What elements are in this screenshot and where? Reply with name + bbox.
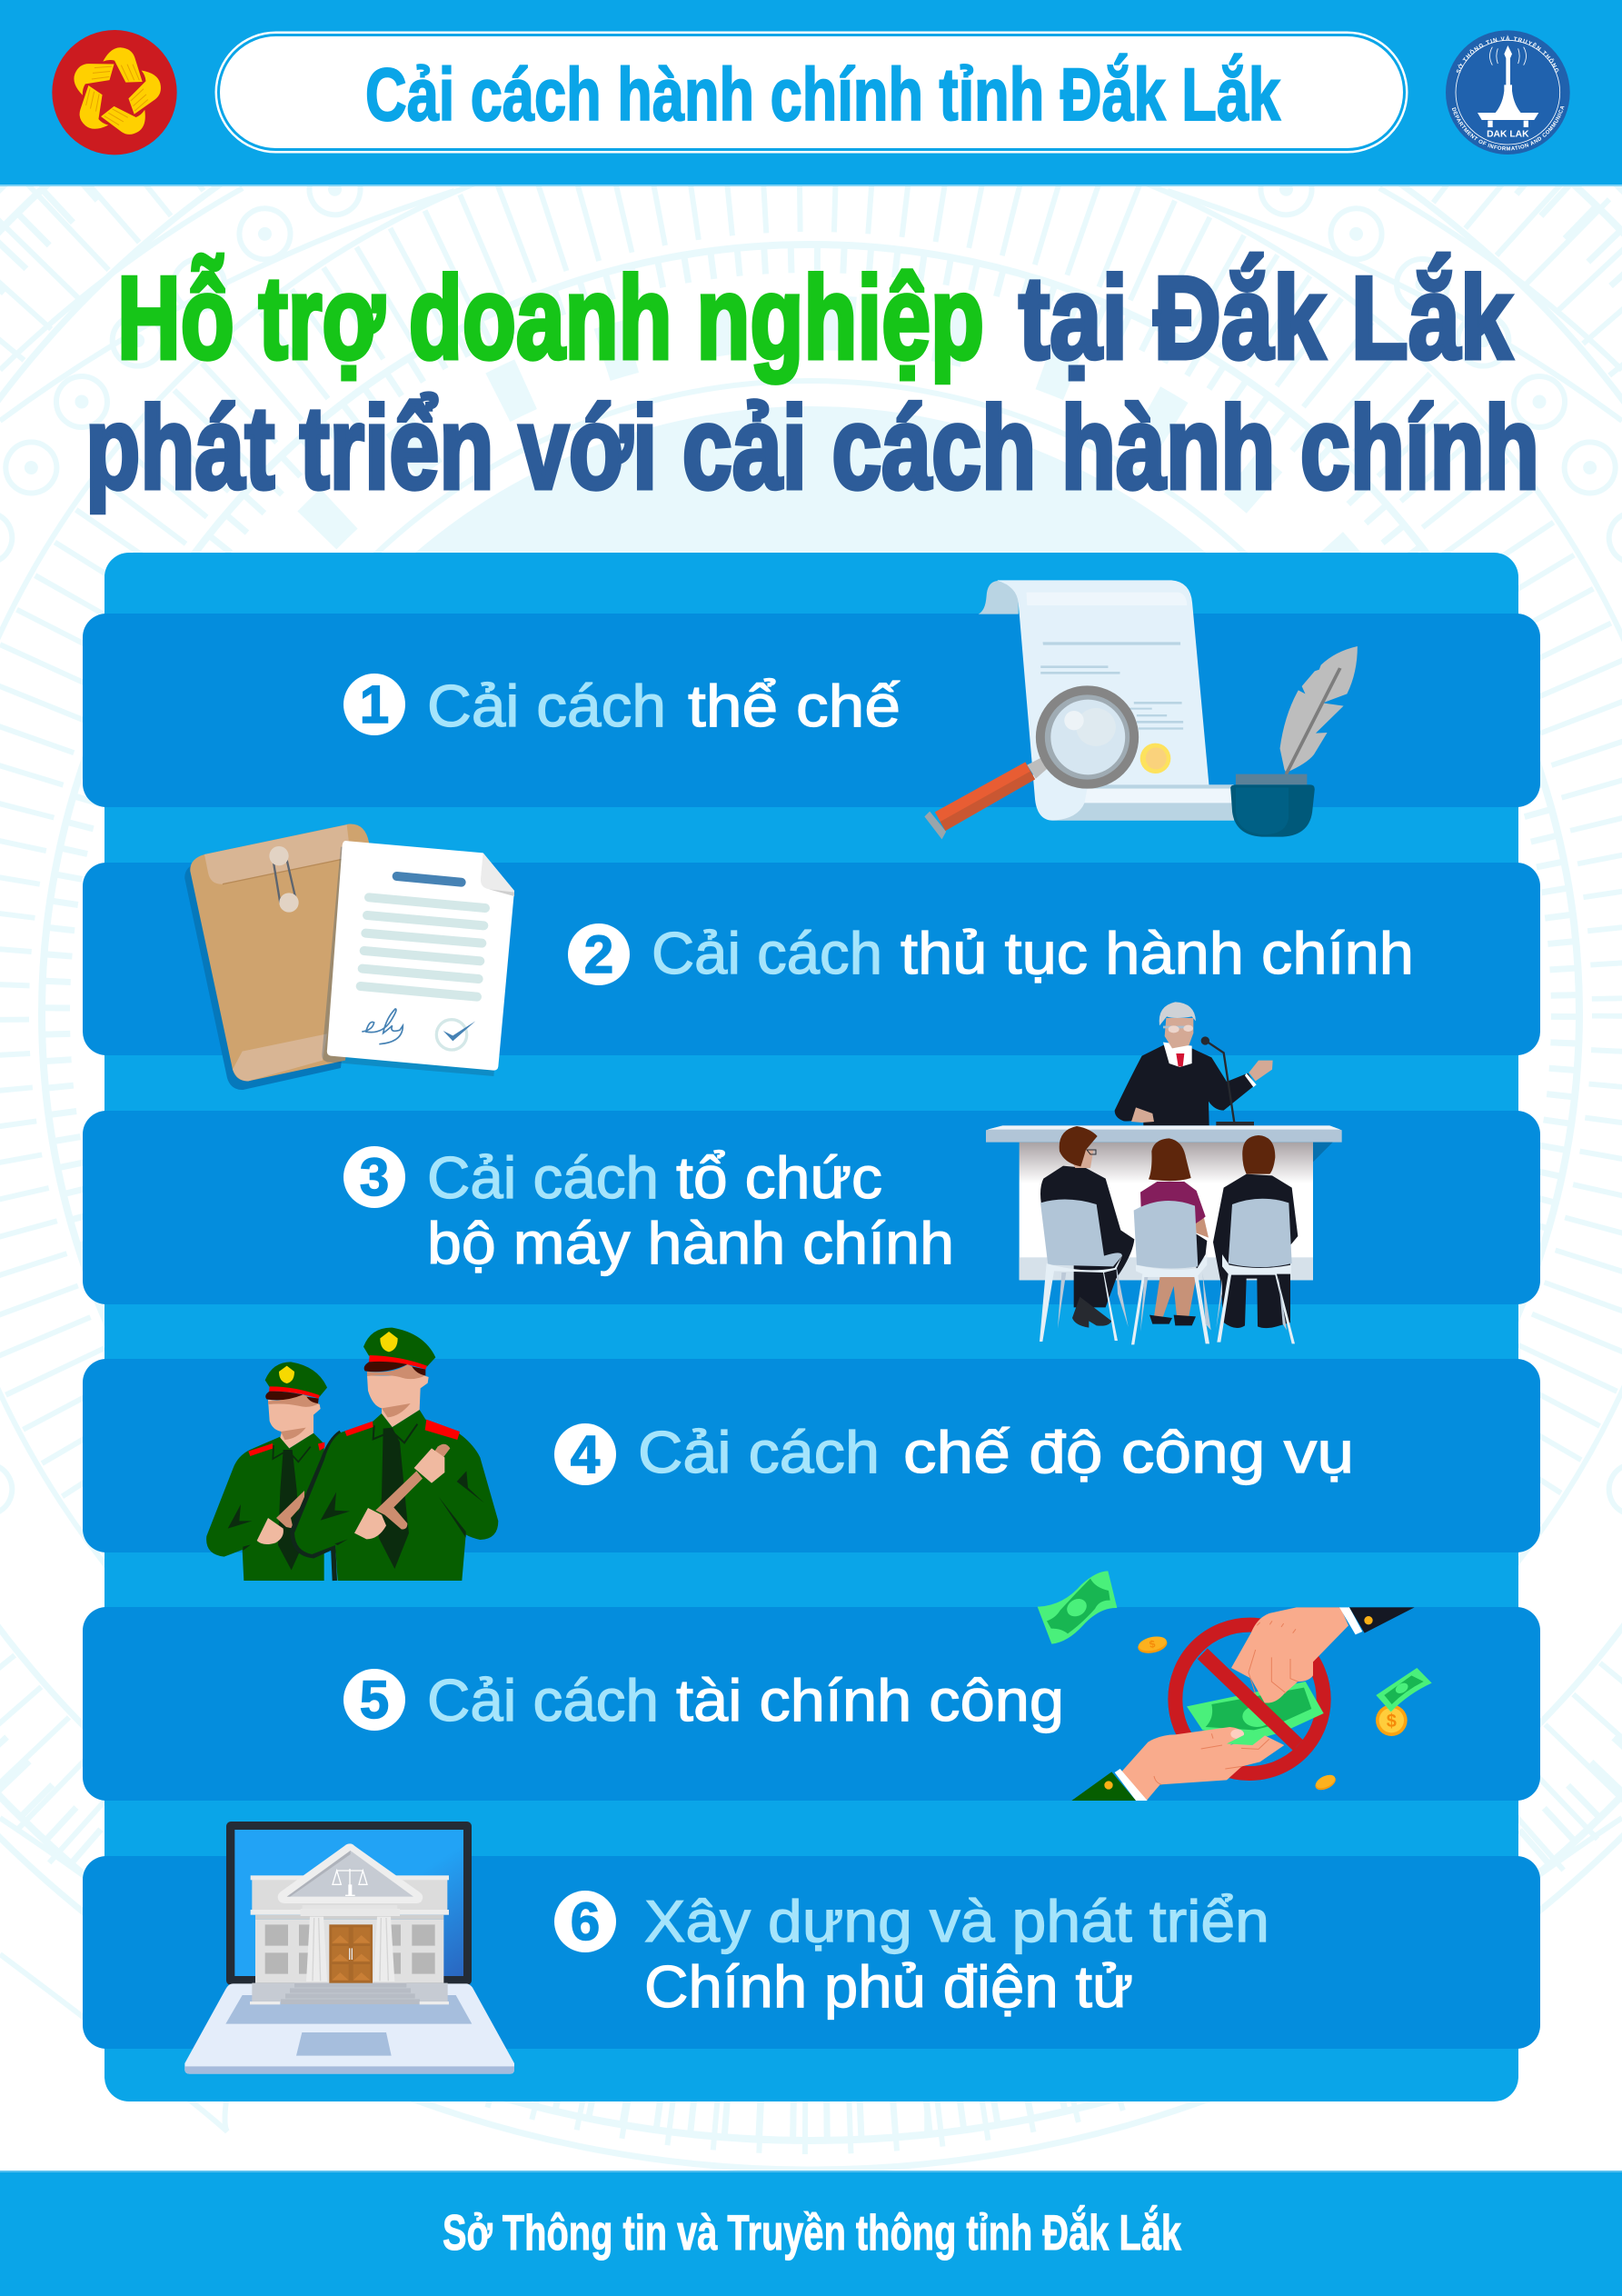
icon: envelope and signed document [184,824,514,1090]
row 6 band: 6 [571,1892,600,1952]
person 2 [1131,1138,1211,1344]
row 5 band: 5 [360,1671,389,1730]
logo: Department of Information and Communications: DEPARTMENT OF INFORMATION AND COMMUNICATIONS [1452,106,1565,151]
front officer [293,1328,498,1581]
row 1 band: Cải cách [427,673,666,739]
back officer [206,1362,327,1581]
footer bar [0,2171,1622,2296]
panel: list background [104,553,1518,2101]
row 1 band: thể chế [688,673,901,739]
row 3 band: bộ máy hành chính [427,1210,954,1276]
logo: Department of Information and Communications: DAK LAK [1487,130,1529,140]
row 4 band [83,1359,1540,1552]
logo: Department of Information and Communications [1446,30,1570,155]
row 4 band: chế độ công vụ [903,1419,1354,1485]
row 3 band [83,1111,1540,1304]
icon: scroll, magnifier and quill [924,580,1358,839]
row 4 band: 4 [571,1425,600,1484]
person 3 [1213,1135,1298,1343]
icon: speaker at a desk with three seated people [986,1002,1342,1344]
row 1 band: 1 [360,675,389,734]
row 3 band: Cải cách [427,1144,659,1211]
main title [85,253,1539,514]
row 2 band: 2 [584,925,613,984]
row 5 band: tài chính công [676,1667,1064,1733]
row 3 band: tổ chức [676,1144,882,1211]
row 4 band: Cải cách [638,1419,880,1485]
row 5 band [83,1607,1540,1801]
main title: tại Đắk Lắk [1019,253,1512,384]
row 6 band: Chính phủ điện tử [644,1953,1133,2020]
row 2 band: Cải cách [652,920,882,986]
row 6 band: Xây dựng và phát triển [644,1888,1269,1954]
main title: Hỗ trợ doanh nghiệp [117,253,984,384]
icon: banned cash exchange between hands: $ [1387,1712,1397,1732]
icon: two uniformed officers [206,1328,498,1581]
logo: Department of Information and Communications: SỞ THÔNG TIN VÀ TRUYỀN THÔNG [1456,35,1559,74]
row 5 band: Cải cách [427,1667,659,1733]
row 1 band [83,614,1540,807]
row 2 band: thủ tục hành chính [901,920,1414,986]
person 1 [1040,1126,1134,1342]
row 3 band: 3 [360,1148,389,1207]
icon: banned cash exchange between hands [1038,1571,1432,1801]
row 6 band [83,1856,1540,2049]
icon: banned cash exchange between hands: $ [1149,1639,1157,1651]
footer bar: Sở Thông tin và Truyền thông tỉnh Đắk Lắk [443,2204,1181,2261]
header title pill [214,31,1408,153]
icon: courthouse on a laptop [184,1822,514,2074]
row 2 band [83,863,1540,1055]
logo: red emblem with five hands [52,30,177,155]
header title pill: Cải cách hành chính tỉnh Đắk Lắk [365,54,1280,136]
header bar [0,0,1622,186]
